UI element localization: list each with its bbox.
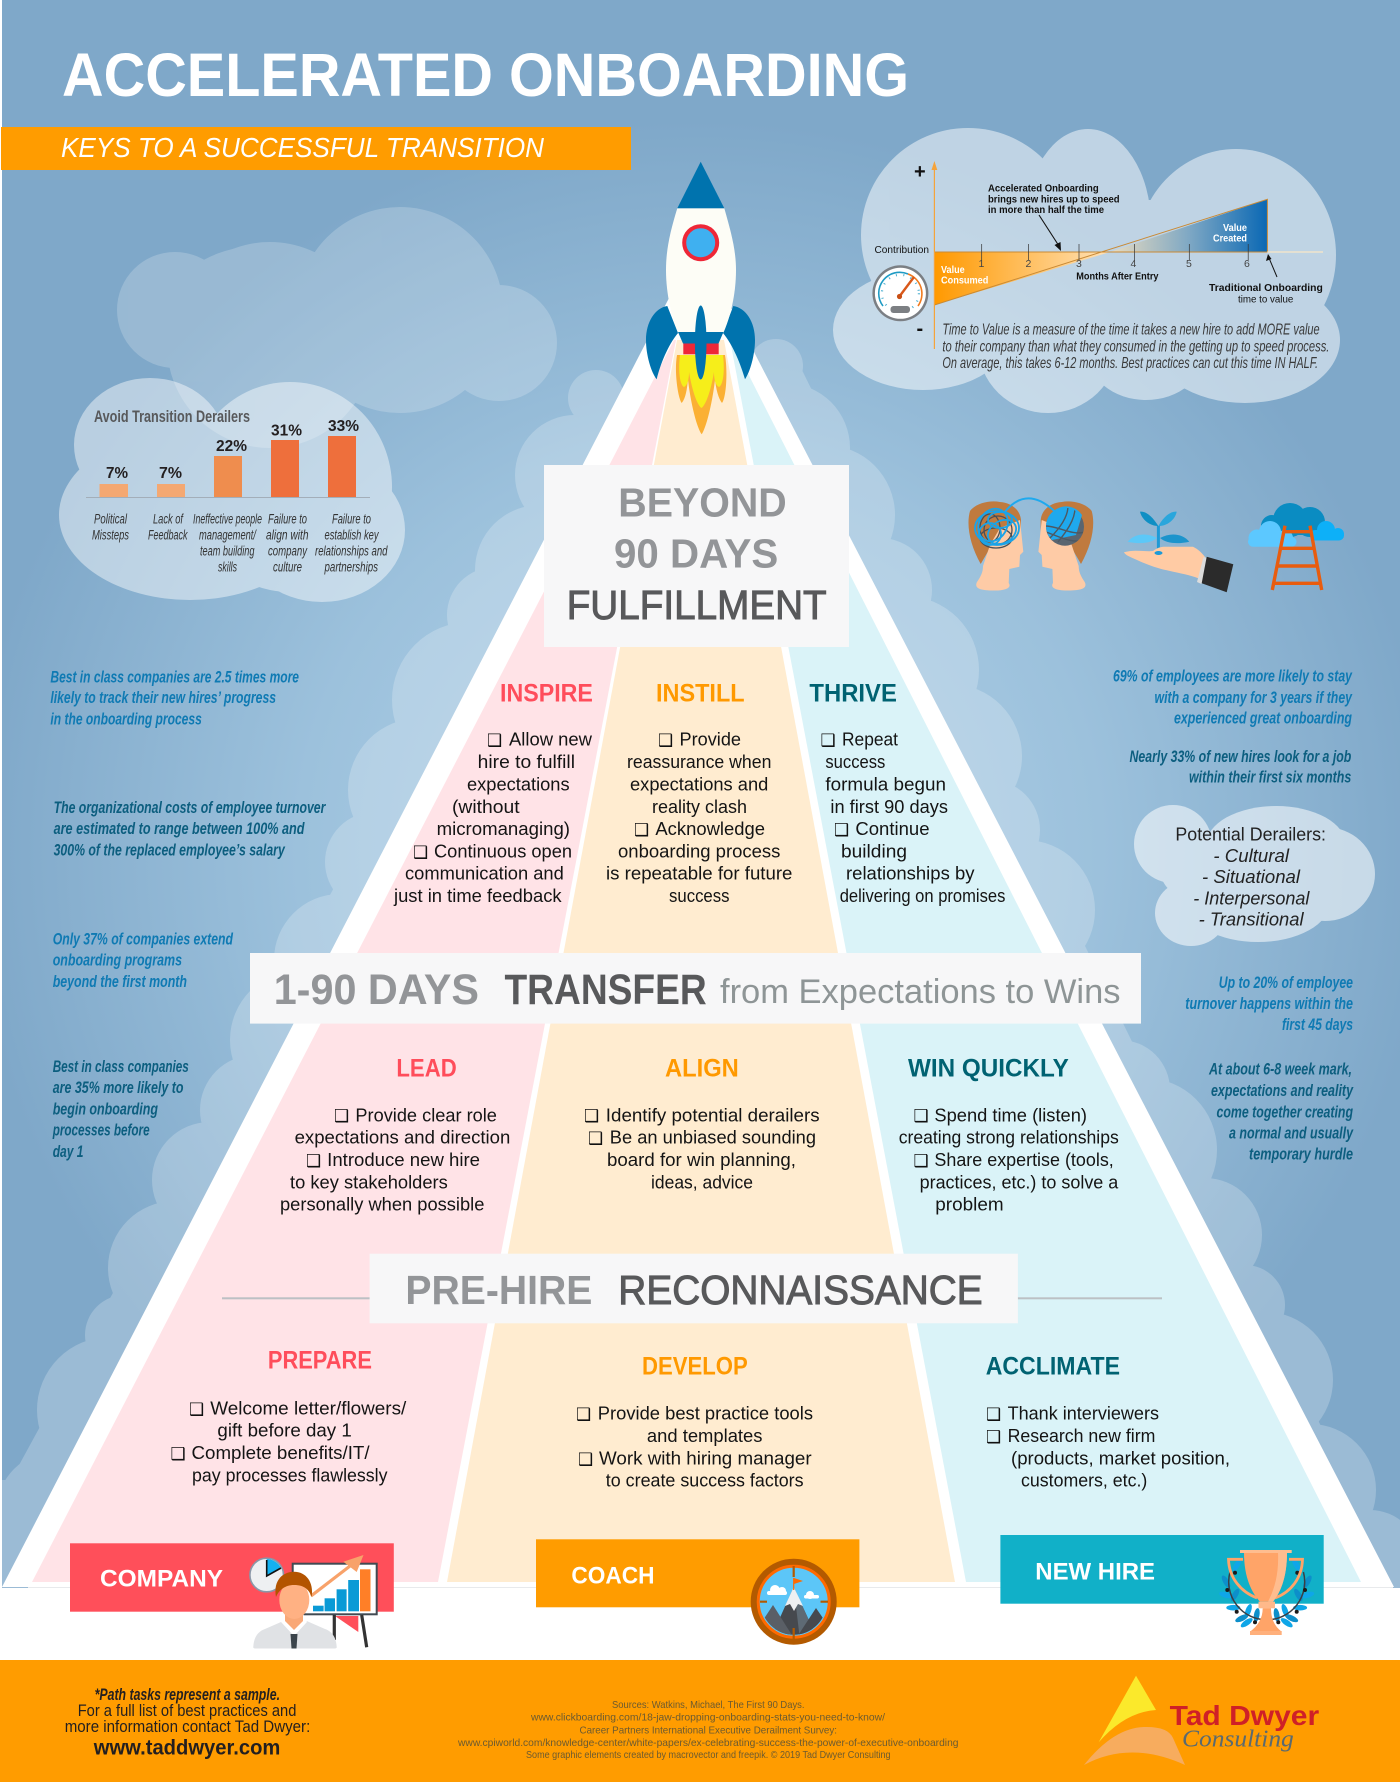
panel: instill: is repeatable for future [606,863,792,884]
month numbers: 1 [978,258,984,270]
accelerated onboarding note: Accelerated Onboarding [988,184,1099,195]
panel: instill: ❑ [658,731,673,751]
title: ACCELERATED ONBOARDING [62,41,909,109]
panel: lead: ❑ [306,1152,321,1172]
panel: thrive: in first 90 days [830,796,948,817]
panel: lead: Provide clear role [355,1104,497,1125]
panel: instill: reality clash [652,796,747,817]
stat: 69 percent stay [1113,666,1353,728]
chart category labels: Missteps [92,528,129,543]
chart category labels: Failure to [268,512,307,526]
logo: tad dwyer consulting: Tad Dwyer [1170,1700,1319,1731]
heading band: pre-hire reconnaissance: RECONNAISSANCE [618,1267,983,1313]
label: coach: COACH [571,1562,654,1589]
panel: lead: LEAD [396,1054,457,1082]
logo: tad dwyer consulting [1084,1676,1319,1765]
panel: develop: and templates [647,1425,762,1446]
accelerated onboarding note: in more than half the time [988,205,1104,216]
panel: acclimate: (products, market position, [1011,1447,1230,1468]
panel: thrive: relationships by [846,863,975,884]
traditional onboarding note: Traditional Onboarding [1209,283,1323,294]
cloud panel: time to value chart [833,128,1340,413]
traditional onboarding note [1209,254,1323,305]
icon: ladder to cloud [1248,503,1344,590]
stat: 6-8 week mark: come together creating [1216,1102,1353,1122]
bar chart: 7% [106,465,128,482]
panel: lead [280,1054,510,1215]
bar chart: 7% [159,465,182,482]
panel: align: ideas, advice [651,1171,753,1192]
icon: plant growing from hand [1124,512,1233,592]
stat: 35 percent more likely: Best in class companies [53,1057,189,1076]
footer contact text: more information contact Tad Dwyer: [65,1717,310,1736]
label: coach [536,1539,859,1645]
stat: 35 percent more likely: processes before [52,1121,150,1140]
value consumed triangle [934,252,1110,305]
value labels [941,222,1247,287]
accelerated onboarding note [988,184,1120,251]
heading box: beyond 90 days fulfillment: 90 DAYS [614,531,778,577]
month ticks and labels [982,244,1248,260]
white ground band [0,1587,1400,1660]
chart category labels: company [268,544,308,559]
bar chart: 22% [216,438,247,455]
bar chart: 33% [328,418,359,435]
panel: align: ❑ [588,1129,603,1149]
stat: 20 percent turnover: Up to 20% of employee [1219,973,1353,992]
panel: win quickly: creating strong relationships [899,1127,1119,1148]
subtitle banner [1,127,631,170]
stat: 20 percent turnover [1185,973,1353,1034]
month numbers: 2 [1026,258,1032,270]
panel: inspire: Allow new [509,729,593,750]
panel: inspire: hire to fulfill [478,751,575,772]
panel: thrive: Repeat [842,729,898,750]
panel: thrive: success [825,751,885,772]
pyramid column: company [32,340,676,1582]
heading band: 1-90 days transfer: 1-90 DAYS [274,966,479,1014]
panel: acclimate [986,1352,1230,1491]
footer contact text: For a full list of best practices and [78,1701,296,1720]
panel: thrive: building [841,840,907,862]
panel: thrive: Continue [855,818,930,839]
cloud: potential derailers: Potential Derailers: [1175,824,1326,844]
footer sources: Some graphic elements created by macrovector and freepik. © 2019 Tad Dwyer Consulting [526,1749,891,1761]
heading band: 1-90 days transfer: TRANSFER [504,966,707,1014]
chart category labels: Political [94,512,128,526]
cloud: potential derailers: - Cultural [1213,846,1290,866]
stat: 6-8 week mark [1208,1060,1354,1164]
icon: trophy with laurel [1219,1550,1315,1635]
panel: prepare: pay processes flawlessly [192,1464,388,1485]
panel: acclimate: Thank interviewers [1008,1403,1159,1424]
panel: lead: to key stakeholders [290,1171,448,1192]
panel: prepare [170,1346,407,1485]
footer bar [0,1660,1400,1782]
panel: prepare: PREPARE [268,1346,372,1374]
label: new hire [1000,1535,1324,1635]
panel: align: ALIGN [665,1054,739,1082]
panel: align: Be an unbiased sounding [610,1127,816,1148]
icon: mountain porthole [750,1559,838,1645]
footer sources [457,1699,959,1761]
stat: turnover costs: The organizational costs of employee turnover [54,798,326,817]
panel: thrive: ❑ [834,820,849,840]
panel: instill: expectations and [630,773,768,794]
panel: instill: reassurance when [627,751,771,772]
stat: 35 percent more likely: begin onboarding [53,1100,158,1119]
pyramid column: new hire [730,340,1361,1582]
accelerated onboarding note: brings new hires up to speed [988,194,1120,205]
panel: develop: ❑ [578,1450,593,1470]
month numbers: 4 [1130,258,1136,270]
panel: acclimate: Research new firm [1008,1425,1155,1446]
panel: inspire: ❑ [487,731,502,751]
chart category labels: management/ [199,528,257,543]
panel: develop: Work with hiring manager [599,1447,812,1468]
chart category labels: partnerships [324,560,378,575]
panel: win quickly: WIN QUICKLY [908,1054,1069,1082]
panel: win quickly: problem [935,1194,1004,1215]
panel: acclimate: customers, etc.) [1021,1470,1147,1491]
panel: lead: ❑ [334,1106,349,1126]
stat: 6-8 week mark: temporary hurdle [1249,1145,1353,1164]
stat: 35 percent more likely: day 1 [53,1142,84,1161]
stat: 6-8 week mark: expectations and reality [1211,1081,1354,1100]
panel: lead: expectations and direction [295,1127,510,1148]
background clouds behind pyramid right [720,339,1400,1610]
panel: lead: Introduce new hire [327,1149,480,1170]
stat: best in class track progress: Best in class companies are 2.5 times more [50,668,299,686]
footer contact text: *Path tasks represent a sample. [95,1685,280,1704]
panel: develop: ❑ [576,1405,591,1425]
heading band: 1-90 days transfer [250,953,1141,1024]
time to value explanation [942,321,1329,372]
panel: inspire [393,679,593,906]
chart category labels: align with [266,528,308,543]
panel: win quickly: ❑ [914,1152,929,1172]
panel: instill: Acknowledge [655,818,765,839]
heading band: pre-hire reconnaissance [222,1254,1162,1323]
value created triangle [1110,199,1267,252]
panel: lead: personally when possible [280,1194,484,1215]
icon: rocket [646,162,755,434]
stat: turnover costs: 300% of the replaced employee’s salary [54,841,286,860]
chart category labels: Feedback [148,528,188,543]
footer sources: www.cpiworld.com/knowledge-center/white-papers/ex-celebrating-success-the-power-of-executive-onboarding [457,1737,959,1749]
rocket flame [676,355,726,434]
panel: inspire: Continuous open [434,840,572,862]
cloud: potential derailers: - Interpersonal [1193,889,1310,909]
panel: instill: Provide [680,729,741,750]
label: company: COMPANY [100,1566,223,1593]
chart category labels: Failure to [332,512,371,526]
chart category labels: skills [218,560,237,575]
panel: acclimate: ❑ [986,1405,1001,1425]
icon: speedometer gauge [872,265,928,321]
footer sources: Sources: Watkins, Michael, The First 90 Days. [612,1699,804,1711]
stat: turnover costs [54,798,326,860]
cloud: potential derailers: - Situational [1202,867,1301,887]
chart category labels: relationships and [315,544,388,559]
logo: tad dwyer consulting: Consulting [1182,1727,1294,1753]
stat: 20 percent turnover: first 45 days [1282,1015,1353,1034]
panel: inspire: just in time feedback [393,885,562,906]
y axis: Contribution [874,245,929,256]
stat: nearly 33 percent [1130,747,1351,786]
panel: develop: Provide best practice tools [598,1403,813,1424]
icon: presenter with chart and clock [250,1555,377,1648]
footer contact text: www.taddwyer.com [93,1736,280,1759]
value labels: Value [1223,222,1247,234]
bar chart: 31% [271,422,302,440]
panel: thrive: ❑ [820,731,836,751]
stat: 6-8 week mark: a normal and usually [1229,1124,1354,1143]
footer sources: Career Partners International Executive Derailment Survey: [580,1724,837,1736]
stat: 35 percent more likely: are 35% more likely to [53,1078,184,1097]
heading box: beyond 90 days fulfillment: FULFILLMENT [567,582,827,628]
panel: align: ❑ [584,1106,599,1126]
traditional onboarding note: time to value [1238,294,1294,305]
panel: instill: INSTILL [656,679,745,707]
panel: align [584,1054,820,1192]
panel: thrive [809,679,1005,906]
panel: acclimate: ACCLIMATE [986,1352,1120,1380]
chart category labels: Lack of [153,512,184,526]
panel: thrive: THRIVE [809,679,897,707]
label: new hire: NEW HIRE [1035,1558,1155,1585]
month numbers: 6 [1244,258,1250,270]
chart category labels [92,512,388,575]
pyramid [2,243,1394,1587]
panel: inspire: ❑ [413,843,428,863]
footer sources: www.clickboarding.com/18-jaw-dropping-onboarding-stats-you-need-to-know/ [530,1712,885,1724]
month numbers: 3 [1076,258,1082,270]
bar chart [86,418,370,498]
stat: turnover costs: are estimated to range between 100% and [54,819,305,838]
background cloud upper left [117,207,557,448]
chart category labels: team building [200,544,255,559]
stat: only 37 percent: onboarding programs [53,950,182,969]
panel: prepare: Complete benefits/IT/ [192,1442,370,1463]
panel: prepare: gift before day 1 [217,1420,352,1441]
chart category labels: Ineffective people [193,512,262,526]
month numbers: 5 [1186,258,1192,270]
panel: instill: onboarding process [618,840,780,862]
panel: inspire: expectations [467,773,570,794]
background clouds behind pyramid left [0,370,700,1590]
y axis [874,161,937,349]
stat: best in class track progress: in the onboarding process [50,710,202,729]
stat: only 37 percent: beyond the first month [53,972,187,991]
y axis: - [916,318,923,340]
panel: develop: to create success factors [606,1470,804,1491]
panel: inspire: (without [452,796,520,817]
chart category labels: culture [273,560,302,575]
stat: only 37 percent: Only 37% of companies extend [53,929,233,948]
stat: only 37 percent [53,929,233,991]
value labels: Consumed [941,275,988,287]
footer contact text [65,1685,310,1759]
panel: win quickly: Share expertise (tools, [934,1149,1114,1170]
panel: prepare: ❑ [189,1400,204,1420]
panel: win quickly: ❑ [914,1106,929,1126]
panel: align: Identify potential derailers [606,1104,820,1125]
value labels: Value [941,264,965,276]
chart category labels: establish key [324,528,379,543]
label: company [70,1543,394,1648]
panel: inspire: INSPIRE [500,679,593,707]
heading box: beyond 90 days fulfillment: BEYOND [618,480,787,526]
subtitle banner: KEYS TO A SUCCESSFUL TRANSITION [61,132,545,163]
y axis: + [914,161,926,183]
icon: two heads with tangled and clear thoughts [968,498,1093,590]
panel: develop: DEVELOP [642,1352,748,1380]
heading band: 1-90 days transfer: from Expectations to Wins [720,973,1120,1011]
chart title: Avoid Transition Derailers [94,408,250,426]
panel: thrive: formula begun [825,773,946,794]
panel: win quickly [899,1054,1119,1215]
heading box: beyond 90 days fulfillment [544,465,849,647]
cloud: potential derailers: - Transitional [1199,910,1305,930]
panel: prepare: ❑ [170,1444,186,1464]
panel: develop [576,1352,813,1491]
pyramid column: coach [447,340,955,1582]
stat: 6-8 week mark: At about 6-8 week mark, [1208,1060,1352,1079]
panel: inspire: micromanaging) [437,818,570,839]
panel: thrive: delivering on promises [840,885,1005,906]
value labels: Created [1213,233,1247,245]
panel: align: board for win planning, [607,1149,796,1170]
panel: instill [606,679,792,906]
stat: best in class track progress: likely to track their new hires’ progress [50,688,276,707]
panel: instill: ❑ [634,820,649,840]
stat: 35 percent more likely [52,1057,189,1161]
panel: win quickly: Spend time (listen) [934,1104,1087,1125]
heading band: pre-hire reconnaissance: PRE-HIRE [405,1267,592,1313]
panel: prepare: Welcome letter/flowers/ [210,1397,407,1418]
panel: inspire: communication and [405,863,564,884]
stat: best in class track progress [50,668,299,729]
panel: win quickly: practices, etc.) to solve a [920,1171,1119,1192]
cloud panel: avoid transition derailers [59,378,405,602]
panel: instill: success [669,885,730,906]
month numbers [978,258,1250,270]
cloud: potential derailers [1134,805,1375,946]
panel: acclimate: ❑ [986,1428,1001,1448]
months after entry label: Months After Entry [1076,272,1159,283]
